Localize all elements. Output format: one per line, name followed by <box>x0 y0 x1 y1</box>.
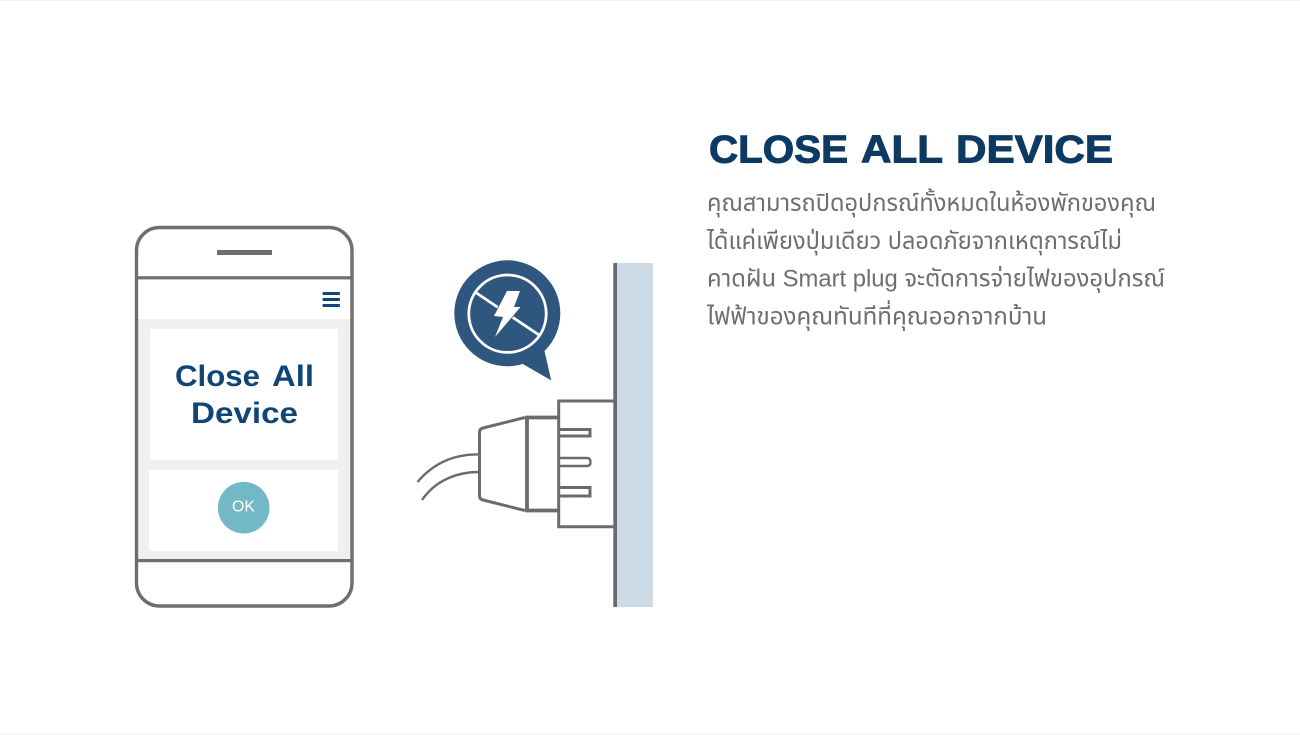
title: DEVICE <box>956 128 1113 172</box>
body text: คุณสามารถปิดอุปกรณ์ทั้งหมดในห้องพักของคุณ <box>707 187 1156 218</box>
title: CLOSE <box>709 128 848 172</box>
phone screen background <box>138 319 351 559</box>
phone illustration <box>136 228 353 606</box>
plug collar <box>527 418 558 510</box>
body text: ไฟฟ้าของคุณทันทีที่คุณออกจากบ้าน <box>706 300 1047 332</box>
socket box <box>559 401 614 527</box>
card: OK button: OK <box>232 498 256 516</box>
plug body <box>480 418 525 510</box>
socket pin middle <box>560 458 590 466</box>
icon: no electricity speech bubble <box>454 260 560 380</box>
power cord upper wire <box>418 454 479 482</box>
wall with blue panel <box>613 263 653 607</box>
body text: คาดฝัน Smart plug จะตัดการจ่ายไฟของอุปกรณ์ <box>707 264 1165 294</box>
card: close all device message: Close <box>175 360 260 393</box>
body text <box>706 187 1165 332</box>
wall socket and plug <box>418 401 614 527</box>
body text: ได้แค่เพียงปุ่มเดียว ปลอดภัยจากเหตุการณ์ไม่ <box>706 227 1122 256</box>
card: close all device message <box>150 329 338 460</box>
phone top divider <box>136 276 353 279</box>
card: close all device message: All <box>272 360 314 393</box>
socket pin bottom <box>560 488 590 496</box>
phone bottom divider <box>136 559 353 562</box>
card: OK button <box>149 470 338 551</box>
phone speaker <box>217 250 272 255</box>
title <box>709 128 1113 172</box>
socket pin top <box>560 430 590 436</box>
phone body outline <box>136 228 352 606</box>
card: close all device message: Device <box>191 397 298 430</box>
title: ALL <box>861 128 943 172</box>
icon: hamburger menu <box>322 292 340 307</box>
power cord lower wire <box>422 472 479 500</box>
